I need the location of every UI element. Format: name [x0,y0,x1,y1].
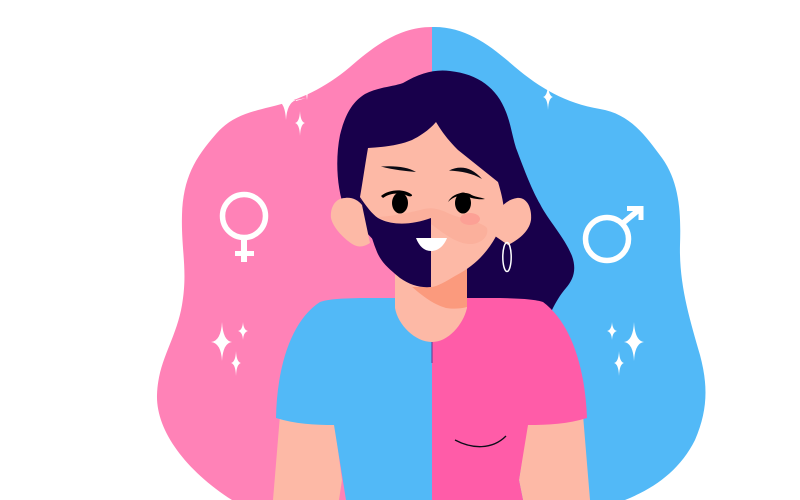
right ear [495,198,531,245]
icon: sparkles lower left [211,322,248,376]
icon: sparkles top left [278,84,312,136]
left arm [273,415,342,500]
mouth [416,238,447,251]
icon: male symbol [586,208,641,260]
shirt: pink right half [432,298,587,500]
beard [360,197,431,287]
panel: blue right half of blob [432,27,705,500]
right arm [519,415,590,500]
blush [460,213,480,225]
icon: female symbol [222,194,266,262]
neck shadow [410,265,467,309]
earring [503,242,511,272]
shirt: blue left half [276,298,432,500]
right eye [448,192,485,214]
hair [337,70,574,310]
cheek and nose shading [378,208,487,244]
panel: pink left half of blob [157,27,432,500]
neck [395,265,467,342]
face [360,122,504,287]
left ear [331,198,370,246]
shirt center line [431,342,433,363]
shirt smile mark [455,436,506,447]
right eyebrow [449,168,482,179]
left eye [381,190,412,214]
icon: sparkles lower right [607,322,644,376]
left eyebrow [381,166,416,172]
icon: sparkle top right [543,84,553,110]
